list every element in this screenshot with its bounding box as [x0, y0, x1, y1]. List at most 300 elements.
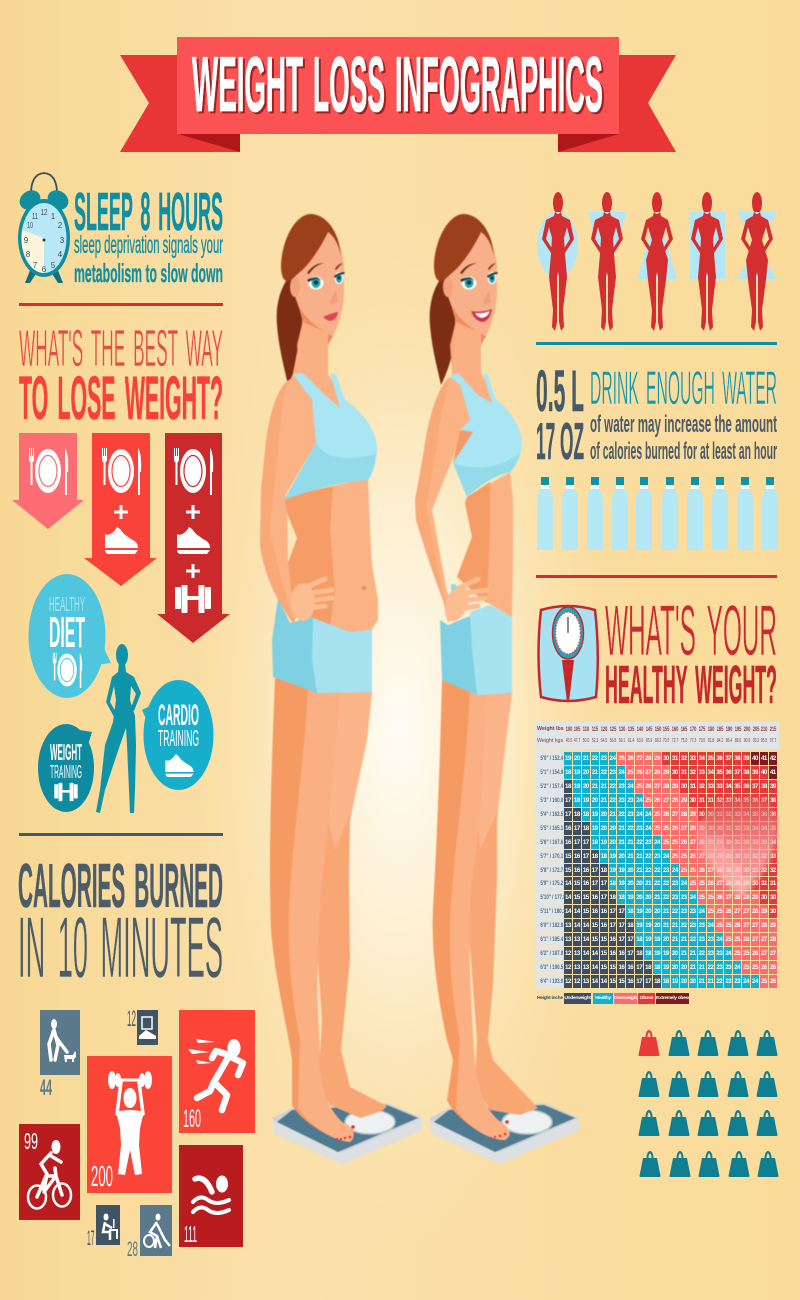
chart body: BMI cells: 17: [574, 839, 580, 846]
chart body: BMI cells: 26: [725, 908, 731, 915]
chart body: BMI cells: 18: [663, 978, 669, 985]
chart body: BMI cells: 6'1" / 185.4: [540, 936, 563, 943]
arrow: diet plus cardio: [84, 433, 157, 586]
chart body: BMI cells: 5'8" / 172.7: [540, 866, 563, 874]
chart body: BMI cells: 27: [752, 936, 758, 943]
neck and chest: [292, 322, 345, 410]
chart body: BMI cells: 19: [565, 755, 571, 762]
chart body: BMI cells: 32: [734, 825, 740, 832]
chart body: BMI cells: 25: [725, 936, 731, 943]
chart body: BMI cells: 5'2" / 157.4: [540, 783, 563, 790]
chart body: BMI cells: 22: [663, 880, 669, 887]
chart body: BMI cells: 5'6" / 167.6: [540, 839, 563, 846]
chart header: weights: 63.6: [636, 738, 643, 744]
chart body: BMI cells: 25: [743, 950, 749, 957]
chart body: BMI cells: 5'3" / 160.0: [540, 797, 563, 804]
chart body: BMI cells: 22: [699, 950, 704, 957]
chart body: BMI cells: 16: [618, 964, 624, 971]
chart body: BMI cells: 19: [663, 964, 669, 971]
chart body: BMI cells: 23: [708, 950, 713, 957]
chart body: BMI cells: 6'3" / 190.5: [540, 964, 563, 971]
chart body: BMI cells: 29: [681, 797, 687, 804]
chart body: BMI cells: 28: [681, 811, 687, 818]
chart body: BMI cells: 28: [699, 839, 704, 846]
front leg: [270, 678, 354, 1142]
chart header: weights: 95.5: [761, 738, 768, 744]
chart body: BMI cells: 20: [690, 978, 696, 985]
chart body: BMI cells: 22: [636, 839, 642, 846]
chart body: BMI cells: 13: [583, 964, 589, 971]
chart body: BMI cells: 27: [770, 950, 776, 957]
icon: bathroom scale: [538, 606, 598, 702]
chart body: BMI cells: 33: [716, 783, 722, 790]
chart body: BMI cells: 23: [654, 853, 660, 860]
chart body: BMI cells: 32: [761, 853, 767, 860]
chart body: BMI cells: 21: [663, 908, 669, 915]
chart body: BMI cells: 14: [592, 964, 598, 971]
chart body: BMI cells: 36: [770, 811, 776, 818]
chart body: BMI cells: 33: [708, 783, 713, 790]
main illustration canvas: SLEEP 8 HOURS: [74, 182, 223, 242]
chart body: BMI cells: 22: [627, 825, 633, 832]
chart body: BMI cells: 19: [574, 783, 580, 790]
chart body: BMI cells: 26: [770, 978, 776, 985]
chart body: BMI cells: 16: [610, 936, 615, 943]
tile: computer work 12: [127, 1006, 158, 1045]
chart body: BMI cells: 24: [610, 755, 615, 762]
shorts: [272, 598, 372, 693]
shorts: [440, 605, 512, 695]
back leg: [315, 680, 387, 1118]
chart body: BMI cells: 32: [743, 839, 749, 846]
icon: alarm clock: 4: [58, 250, 63, 259]
chart body: BMI cells: 33: [725, 797, 731, 804]
chart header: weights: 79.5: [699, 738, 705, 744]
chart body: BMI cells: 18: [592, 839, 598, 846]
chart header: weights: 100: [565, 726, 572, 733]
tile: vacuuming 28: [127, 1205, 172, 1261]
chart body: BMI cells: 24: [716, 936, 722, 943]
chart body: BMI cells: 13: [574, 936, 580, 943]
chart body: BMI cells: 25: [681, 853, 687, 860]
chart body: BMI cells: 23: [618, 797, 624, 804]
chart header: weights: 45.5: [565, 738, 572, 744]
chart body: BMI cells: 13: [574, 950, 580, 957]
shape: rectangle: [690, 192, 725, 331]
chart body: BMI cells: 21: [583, 755, 589, 762]
chart body: BMI cells: 30: [752, 880, 758, 887]
tile: desk work 17: [87, 1205, 120, 1250]
chart header: weights: 110: [583, 726, 590, 733]
chart header: weights: 47.7: [574, 738, 581, 744]
chart body: BMI cells: 17: [610, 922, 615, 929]
chart body: BMI cells: 23: [699, 922, 704, 929]
chart body: BMI cells: 21: [654, 894, 660, 901]
chart body: BMI cells: 15: [592, 936, 598, 943]
chart body: BMI cells: 20: [654, 922, 660, 929]
chart body: BMI cells: 5'11" / 180.3: [540, 908, 565, 915]
icon: alarm clock: 6: [42, 265, 47, 274]
chart body: BMI cells: 16: [627, 964, 633, 971]
chart body: BMI cells: 27: [654, 783, 660, 790]
main illustration canvas: CARDIO: [158, 699, 199, 732]
chart body: BMI cells: 23: [610, 769, 615, 776]
chart body: BMI cells: 22: [654, 880, 660, 887]
chart body: BMI cells: 28: [708, 853, 713, 860]
weight icons grid: [638, 1030, 778, 1177]
chart body: BMI cells: 33: [690, 755, 696, 762]
chart body: BMI cells: 28: [663, 783, 669, 790]
chart body: BMI cells: 20: [583, 783, 589, 790]
chart body: BMI cells: 16: [583, 880, 589, 887]
chart body: BMI cells: 27: [725, 894, 731, 901]
chart header: weights: 54.5: [601, 738, 607, 744]
chart body: BMI cells: 29: [690, 811, 696, 818]
chart body: BMI cells: 19: [618, 866, 624, 874]
chart body: BMI cells: 30: [734, 853, 740, 860]
chart header: weights: 195: [734, 726, 741, 733]
title: LOSS: [313, 40, 385, 128]
chart body: BMI cells: 30: [716, 825, 722, 832]
chart body: BMI cells: 27: [699, 853, 704, 860]
chart body: BMI cells: 30: [770, 894, 776, 901]
chart body: BMI cells: 21: [708, 978, 713, 985]
chart body: BMI cells: 34: [761, 825, 767, 832]
chart body: BMI cells: 21: [592, 769, 598, 776]
chart body: BMI cells: 26: [734, 922, 740, 929]
chart body: BMI cells: 18: [583, 811, 589, 818]
back leg: [468, 680, 538, 1115]
neck and chest: [452, 322, 495, 422]
chart body: BMI cells: 14: [592, 978, 598, 985]
chart body: BMI cells: 25: [708, 908, 713, 915]
chart body: BMI cells: 17: [627, 950, 633, 957]
chart body: BMI cells: 28: [654, 769, 660, 776]
chart body: BMI cells: 17: [592, 866, 598, 874]
chart header: weights: Weight lbs: [537, 726, 564, 732]
chart header: weights: 56.8: [610, 738, 616, 744]
chart body: BMI cells: 27: [743, 908, 749, 915]
chart body: BMI cells: 16: [618, 950, 624, 957]
chart body: BMI cells: 29: [663, 769, 669, 776]
chart body: BMI cells: 24: [708, 922, 713, 929]
shape: triangle: [637, 192, 677, 331]
chart body: BMI cells: 23: [699, 936, 704, 943]
chart body: BMI cells: 34: [770, 839, 776, 846]
main illustration canvas: WEIGHT: [50, 739, 82, 765]
chart body: BMI cells: 21: [618, 839, 624, 846]
bubble: healthy diet: DIET: [49, 608, 85, 657]
chart body: BMI cells: 26: [636, 769, 642, 776]
chart body: BMI cells: 17: [610, 908, 615, 915]
chart body: BMI cells: 31: [708, 797, 713, 804]
chart body: BMI cells: 20: [627, 866, 633, 874]
back skin under arm: [453, 430, 473, 463]
chart body: BMI cells: 24: [725, 950, 731, 957]
chart body: BMI cells: 25: [663, 825, 669, 832]
chart body: BMI cells: 37: [734, 769, 740, 776]
chart body: BMI cells: 14: [574, 922, 580, 929]
chart body: BMI cells: 14: [565, 894, 571, 901]
chart body: BMI cells: 24: [636, 797, 642, 804]
chart body: BMI cells: 27: [743, 922, 749, 929]
chart body: BMI cells: 29: [725, 853, 731, 860]
chart body: BMI cells: 19: [636, 922, 642, 929]
main illustration canvas: 17 OZ: [536, 413, 584, 471]
chart body: BMI cells: 19: [645, 922, 651, 929]
chart body: BMI cells: 6'2" / 187.9: [540, 950, 563, 957]
chart body: BMI cells: 5'10" / 177.8: [540, 894, 566, 901]
chart body: BMI cells: 14: [565, 880, 571, 887]
chart header: weights: 175: [699, 726, 706, 733]
chart body: BMI cells: 20: [601, 811, 607, 818]
chart body: BMI cells: 5'5" / 165.1: [540, 825, 563, 832]
chart body: BMI cells: 25: [654, 811, 660, 818]
chart body: BMI cells: 16: [565, 825, 571, 832]
torso with belly: [284, 478, 378, 634]
chart body: BMI cells: 23: [690, 922, 696, 929]
chart body: BMI cells: 18: [645, 964, 651, 971]
chart body: BMI cells: 26: [681, 839, 687, 846]
chart body: BMI cells: 23: [716, 950, 722, 957]
chart body: BMI cells: 20: [645, 908, 651, 915]
chart body: BMI cells: 20: [592, 797, 598, 804]
chart body: BMI cells: 19: [654, 950, 660, 957]
woman after: slim, on scale: [415, 214, 579, 1164]
chart body: BMI cells: 17: [618, 936, 624, 943]
chart body: BMI cells: 17: [583, 853, 589, 860]
chart body: BMI cells: 20: [645, 894, 651, 901]
chart body: BMI cells: 27: [681, 825, 687, 832]
chart body: BMI cells: 23: [734, 978, 740, 985]
chart body: BMI cells: 25: [645, 797, 651, 804]
chart body: BMI cells: 27: [752, 922, 758, 929]
chart body: BMI cells: 26: [654, 797, 660, 804]
chart body: BMI cells: 19: [636, 908, 642, 915]
chart body: BMI cells: 20: [574, 755, 580, 762]
tile: running 160: 160: [183, 1105, 201, 1133]
chart body: BMI cells: 20: [654, 908, 660, 915]
chart body: BMI cells: 17: [601, 894, 607, 901]
chart body: BMI cells: 25: [716, 908, 722, 915]
chart body: BMI cells: 24: [672, 866, 678, 874]
chart body: BMI cells: 20: [601, 825, 607, 832]
chart body: BMI cells: 24: [654, 839, 660, 846]
chart body: BMI cells: 5'4" / 162.5: [540, 811, 563, 818]
chart body: BMI cells: 25: [734, 950, 740, 957]
arrow: diet: [12, 433, 84, 529]
main illustration canvas: WHAT'S THE BEST WAY: [19, 320, 223, 378]
chart body: BMI cells: 18: [627, 922, 633, 929]
chart body: BMI cells: 33: [699, 769, 704, 776]
chart body: BMI cells: 18: [565, 783, 571, 790]
chart body: BMI cells: 37: [725, 755, 731, 762]
chart header: weights: 50.0: [583, 738, 590, 744]
chart body: BMI cells: 22: [645, 853, 651, 860]
chart body: BMI cells: 21: [681, 936, 687, 943]
chart body: BMI cells: 32: [699, 783, 704, 790]
chart body: BMI cells: 28: [716, 866, 722, 874]
chart body: BMI cells: 18: [645, 950, 651, 957]
chart body: BMI cells: 23: [672, 894, 678, 901]
chart body: BMI cells: 13: [583, 978, 589, 985]
chart body: BMI cells: 20: [627, 880, 633, 887]
chart body: BMI cells: 19: [592, 811, 598, 818]
chart body: BMI cells: 25: [654, 825, 660, 832]
chart header: weights: 59.1: [619, 738, 625, 744]
chart body: BMI cells: 23: [601, 755, 607, 762]
chart body: BMI cells: 21: [645, 880, 651, 887]
front leg: [433, 678, 509, 1140]
chart body: BMI cells: [540, 752, 777, 988]
chart body: BMI cells: 21: [610, 811, 615, 818]
chart body: BMI cells: 18: [610, 880, 615, 887]
chart body: BMI cells: 30: [690, 797, 696, 804]
chart header: weights: 70.5: [663, 738, 670, 744]
slim torso: [457, 472, 513, 617]
chart body: BMI cells: 22: [654, 866, 660, 874]
chart body: BMI cells: 28: [752, 908, 758, 915]
chart body: BMI cells: 28: [690, 825, 696, 832]
chart body: BMI cells: 22: [610, 797, 615, 804]
title banner: [120, 37, 676, 152]
chart body: BMI cells: 17: [565, 797, 571, 804]
shape: round: [537, 192, 578, 331]
chart body: BMI cells: 41: [761, 755, 767, 762]
main illustration canvas: sleep deprivation signals your: [74, 231, 223, 259]
chart body: BMI cells: 30: [743, 866, 749, 874]
chart body: BMI cells: 26: [699, 866, 704, 874]
chart legend: Underweight: [564, 996, 591, 1001]
chart body: BMI cells: 16: [574, 853, 580, 860]
chart body: BMI cells: 16: [601, 922, 607, 929]
chart body: BMI cells: 25: [761, 978, 767, 985]
chart body: BMI cells: 16: [583, 866, 589, 874]
chart body: BMI cells: 17: [583, 839, 589, 846]
chart body: BMI cells: 31: [761, 880, 767, 887]
chart body: BMI cells: 25: [618, 755, 624, 762]
chart header: weights: 165: [681, 726, 688, 733]
main illustration canvas: 0.5 L: [536, 359, 584, 424]
chart body: BMI cells: 42: [770, 755, 776, 762]
tile: swimming 111: 111: [184, 1221, 197, 1247]
chart header: weights: 205: [752, 726, 759, 733]
chart body: BMI cells: 26: [770, 964, 776, 971]
chart body: BMI cells: 15: [583, 908, 589, 915]
chart body: BMI cells: 18: [574, 797, 580, 804]
chart body: BMI cells: 34: [699, 755, 704, 762]
chart body: BMI cells: 21: [636, 853, 642, 860]
chart body: BMI cells: 13: [574, 964, 580, 971]
chart body: BMI cells: 22: [690, 936, 696, 943]
chart body: BMI cells: 15: [583, 894, 589, 901]
chart body: BMI cells: 28: [761, 922, 767, 929]
chart body: BMI cells: 21: [618, 825, 624, 832]
chart body: BMI cells: 25: [716, 922, 722, 929]
chart body: BMI cells: 17: [574, 825, 580, 832]
chart body: BMI cells: 30: [770, 908, 776, 915]
chart body: BMI cells: 22: [610, 783, 615, 790]
chart body: BMI cells: 19: [610, 853, 615, 860]
chart body: BMI cells: 25: [743, 964, 749, 971]
chart body: BMI cells: 19: [654, 936, 660, 943]
chart body: BMI cells: 5'0" / 152.4: [540, 755, 563, 762]
woman before: with belly, on scale: [260, 214, 422, 1164]
bubble: healthy diet: HEALTHY: [49, 594, 85, 616]
chart body: BMI cells: 21: [601, 797, 607, 804]
chart body: BMI cells: 32: [681, 755, 687, 762]
chart body: BMI cells: 36: [725, 769, 731, 776]
chart body: BMI cells: 29: [743, 880, 749, 887]
chart body: BMI cells: 21: [636, 866, 642, 874]
tile: cycling 99: 99: [24, 1128, 38, 1154]
chart body: BMI cells: 27: [734, 908, 740, 915]
chart body: BMI cells: 30: [708, 811, 713, 818]
chart body: BMI cells: 16: [565, 839, 571, 846]
chart body: BMI cells: 22: [672, 908, 678, 915]
chart body: BMI cells: 12: [574, 978, 580, 985]
chart body: BMI cells: 25: [708, 894, 713, 901]
chart body: BMI cells: 14: [601, 978, 607, 985]
chart legend: Healthy: [595, 996, 611, 1001]
chart header: weights: 160: [672, 726, 679, 733]
chart body: BMI cells: 31: [770, 880, 776, 887]
chart body: BMI cells: 21: [690, 964, 696, 971]
chart header: weights: 65.9: [645, 738, 652, 744]
chart body: BMI cells: 18: [654, 964, 660, 971]
chart body: BMI cells: 25: [681, 866, 687, 874]
chart body: BMI cells: 23: [681, 894, 687, 901]
chart body: BMI cells: 32: [716, 797, 722, 804]
chart body: BMI cells: 24: [743, 978, 749, 985]
chart body: BMI cells: 25: [690, 880, 696, 887]
chart body: BMI cells: 28: [743, 894, 749, 901]
chart body: BMI cells: 35: [716, 769, 722, 776]
chart body: BMI cells: 27: [708, 866, 713, 874]
chart body: BMI cells: 23: [690, 908, 696, 915]
chart body: BMI cells: 32: [690, 769, 696, 776]
tile: computer work 12: 12: [127, 1006, 136, 1031]
chart body: BMI cells: 20: [681, 978, 687, 985]
BMI chart: [536, 722, 779, 1004]
chart header: weights: 81.8: [708, 738, 714, 744]
chart body: BMI cells: 38: [734, 755, 740, 762]
chart body: BMI cells: 38: [743, 769, 749, 776]
arrow: diet plus cardio plus weights: [157, 433, 230, 643]
chart body: BMI cells: 20: [672, 964, 678, 971]
chart body: BMI cells: 34: [725, 783, 731, 790]
chart body: BMI cells: 18: [592, 853, 598, 860]
chart body: BMI cells: 15: [618, 978, 624, 985]
chart body: BMI cells: 26: [690, 853, 696, 860]
chart body: BMI cells: 21: [592, 783, 598, 790]
chart body: BMI cells: 24: [681, 880, 687, 887]
chart legend: Obese: [640, 996, 653, 1001]
chart body: BMI cells: 24: [645, 811, 651, 818]
chart body: BMI cells: 14: [583, 936, 589, 943]
chart body: BMI cells: 20: [663, 936, 669, 943]
chart header: weights: 105: [574, 726, 581, 733]
chart body: BMI cells: 32: [761, 866, 767, 874]
icon: alarm clock: 1: [51, 212, 56, 221]
chart body: BMI cells: 21: [672, 922, 678, 929]
chart body: BMI cells: 15: [601, 964, 607, 971]
chart body: BMI cells: 34: [708, 769, 713, 776]
chart body: BMI cells: 31: [743, 853, 749, 860]
chart body: BMI cells: 19: [592, 825, 598, 832]
chart body: BMI cells: 21: [672, 936, 678, 943]
chart body: BMI cells: 17: [618, 908, 624, 915]
